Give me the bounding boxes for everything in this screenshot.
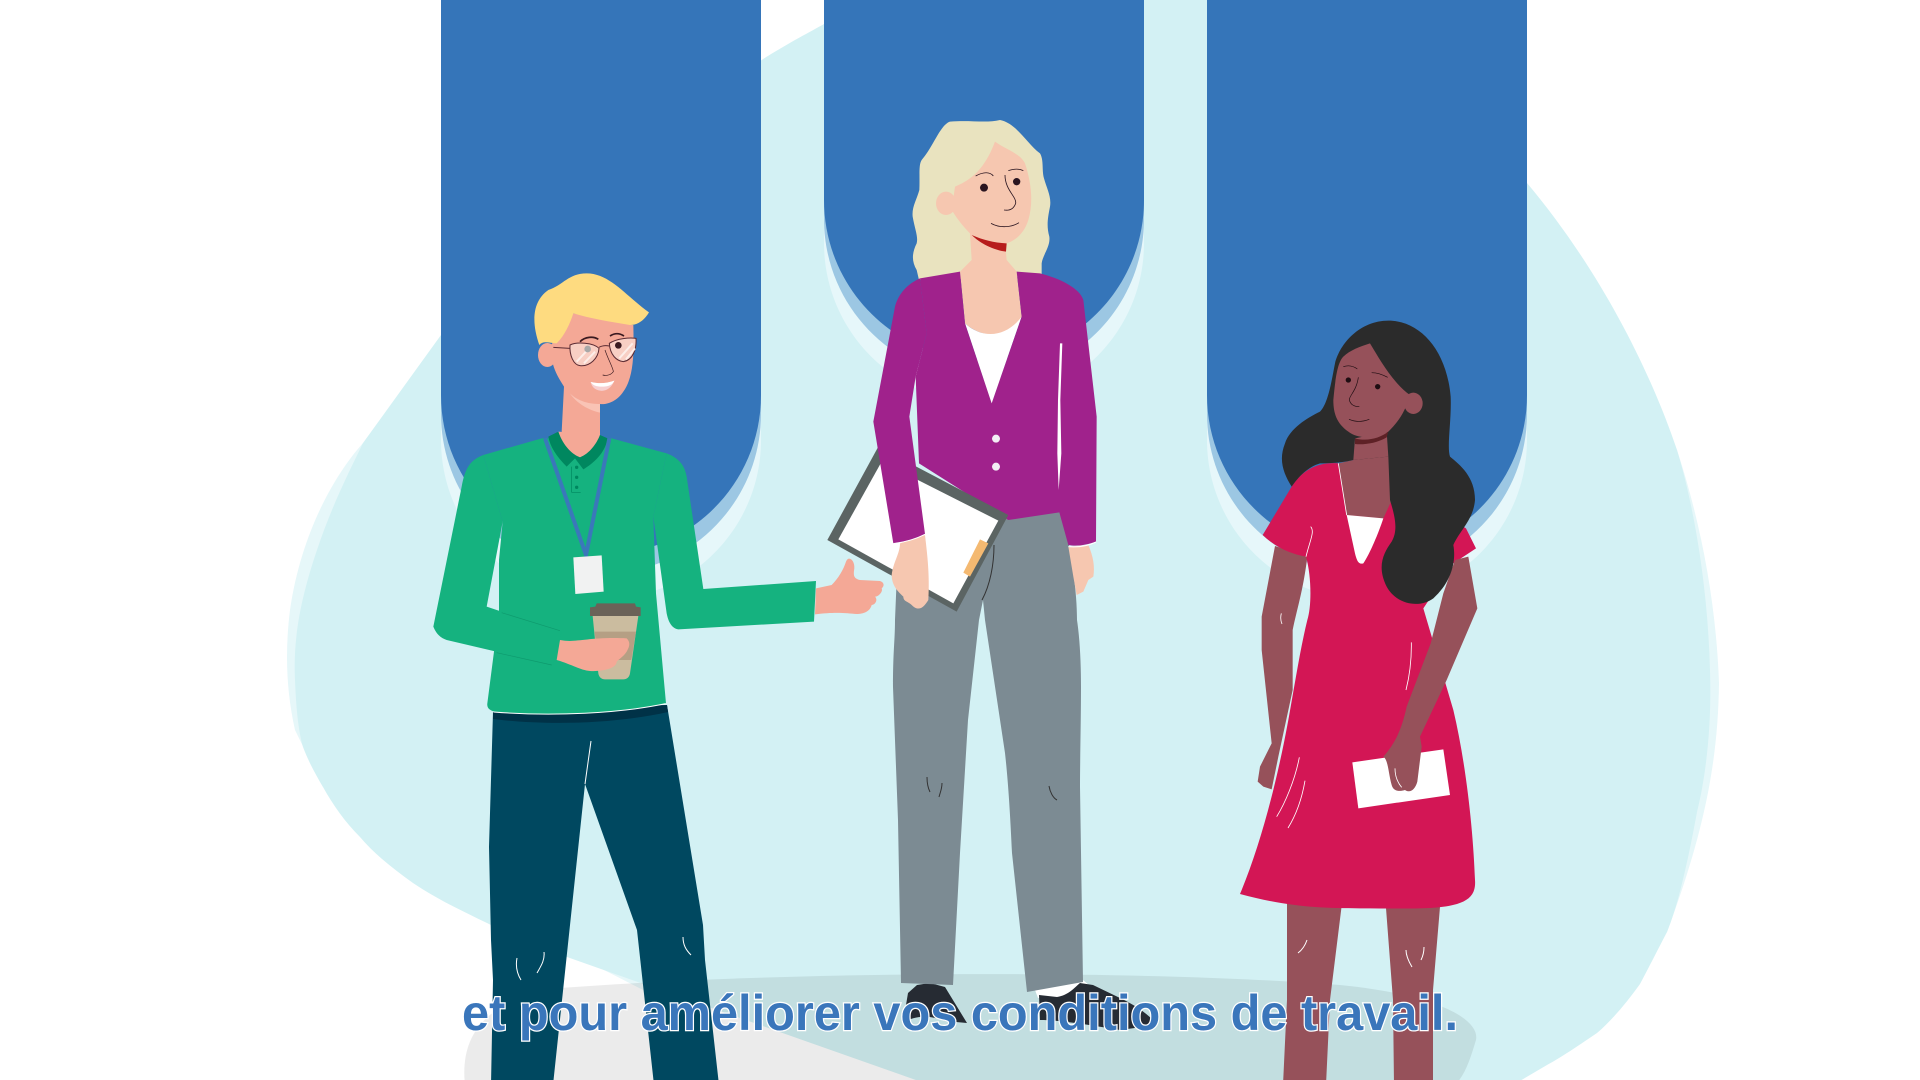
- man shirt hem highlight: [493, 704, 666, 714]
- woman shoes: [903, 980, 1157, 1030]
- coffee cup: [590, 603, 641, 679]
- red dress: [1240, 463, 1476, 909]
- man collar: [548, 432, 608, 492]
- man head and neck: [538, 313, 634, 460]
- woman right hand: [1068, 545, 1094, 595]
- dress neckline: [1338, 463, 1383, 564]
- cardigan buttons: [992, 435, 1000, 471]
- dress woman hair: [1282, 321, 1475, 604]
- dress woman left arm: [1258, 546, 1307, 789]
- dress woman right arm and hand: [1383, 557, 1477, 791]
- man trousers: [489, 705, 719, 1080]
- man hair: [534, 273, 649, 345]
- woman hair: [913, 120, 1050, 280]
- man face details and glasses: [553, 334, 636, 391]
- man open hand: [815, 559, 884, 614]
- dress highlights: [1277, 527, 1457, 828]
- background blob: main: [295, 0, 1710, 1080]
- man neck opening: [558, 432, 600, 457]
- woman trousers: [893, 500, 1083, 992]
- dress woman face: [1333, 343, 1423, 460]
- man left arm: [433, 455, 562, 665]
- man torso: [483, 438, 667, 714]
- panel: blue banner left: [441, 0, 761, 600]
- panel: blue banner right: [1207, 0, 1527, 600]
- woman left arm: [873, 278, 927, 543]
- man right arm: [653, 453, 816, 629]
- card: [1352, 749, 1450, 808]
- figure: man in green sweater with coffee: [433, 273, 884, 1080]
- man hand on cup: [557, 638, 629, 671]
- figure: woman in red dress: [1240, 321, 1477, 1080]
- woman head and neck: [936, 142, 1031, 335]
- man lanyard and badge: [545, 438, 609, 594]
- figure: woman in purple cardigan with clipboard: [827, 120, 1157, 1030]
- clipboard: [827, 447, 1008, 612]
- woman left hand: [892, 535, 929, 609]
- cardigan fold highlight: [1057, 343, 1062, 490]
- panel: blue banner centre: [824, 0, 1144, 403]
- background blob: pale outer edge: [287, 443, 1719, 991]
- woman white top: [965, 317, 1022, 403]
- dress woman neck and chest: [1338, 432, 1393, 518]
- woman cardigan body: [916, 272, 1097, 546]
- dress woman legs: [1283, 895, 1441, 1080]
- subtitle caption: et pour améliorer vos conditions de travail.: [462, 985, 1458, 1041]
- floor shadow: [464, 974, 1476, 1080]
